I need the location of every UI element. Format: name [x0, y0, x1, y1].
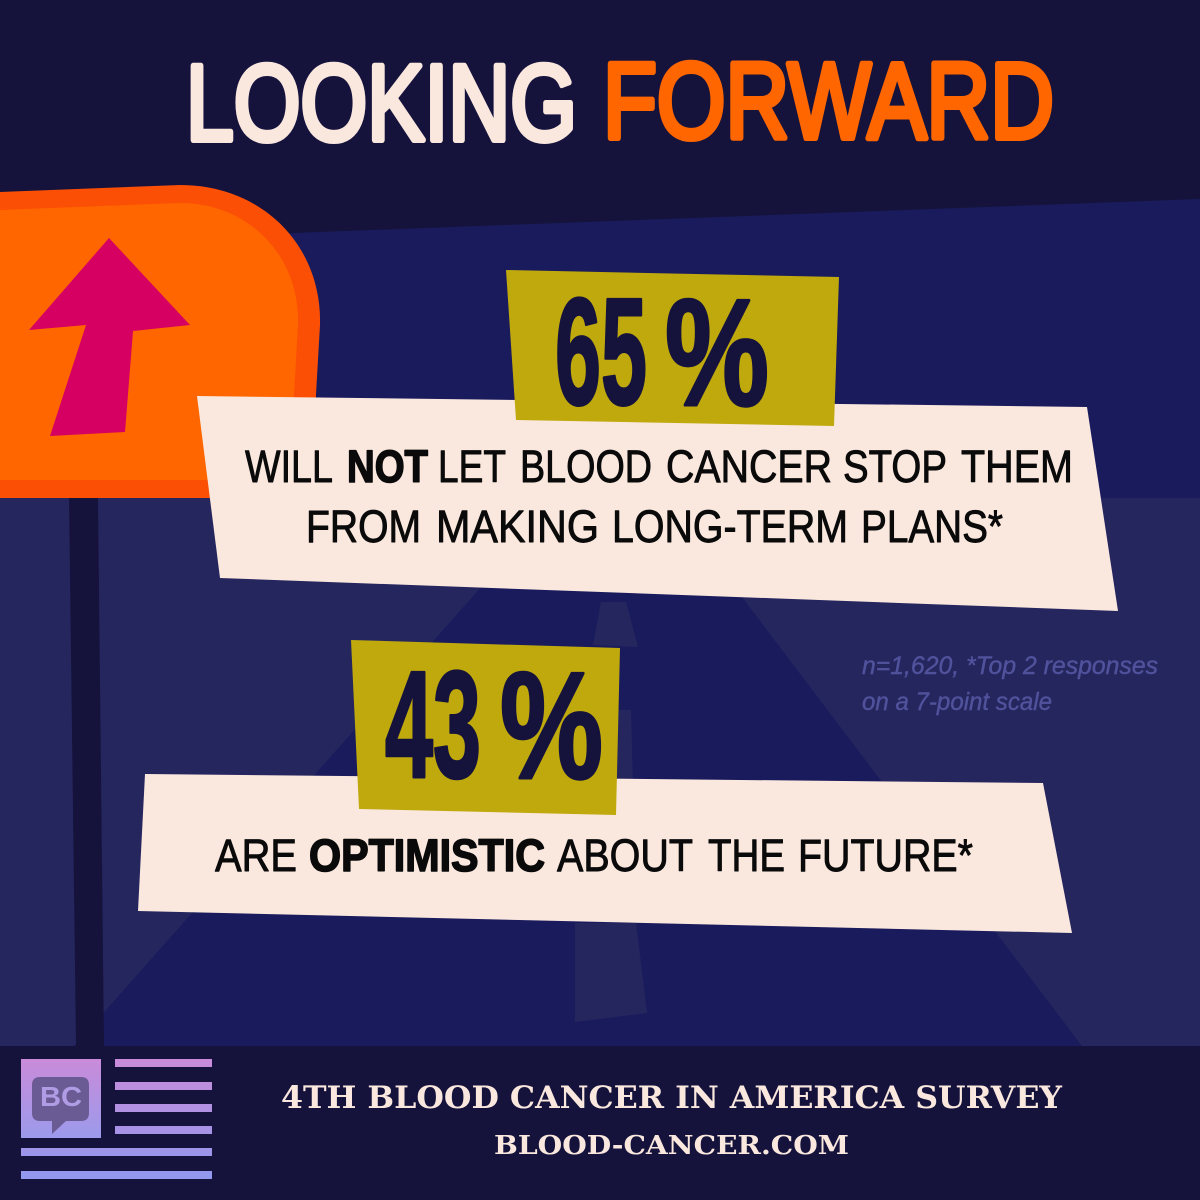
background: ground	[0, 498, 1200, 1046]
title: FORWARD	[603, 40, 1054, 161]
statement text: THEM	[961, 441, 1073, 492]
statement text: FUTURE*	[798, 830, 973, 881]
title	[186, 40, 1054, 163]
panel background	[138, 774, 1072, 933]
statistic tag: 65%	[506, 267, 839, 438]
statement text: BLOOD	[520, 441, 652, 492]
road lane markings	[575, 602, 647, 1022]
statement text: STOP	[843, 441, 947, 492]
footnote	[862, 652, 1158, 716]
icon: upward arrow	[29, 238, 190, 436]
statistic tag: 65%: %	[665, 268, 769, 438]
statement text	[215, 830, 973, 881]
statement text: PLANS*	[861, 501, 1003, 552]
footnote: n=1,620, *Top 2 responses	[862, 652, 1158, 680]
statement text: LET	[438, 441, 506, 492]
sign outer border	[0, 185, 320, 498]
road	[74, 498, 1082, 1046]
statement text: CANCER	[666, 441, 832, 492]
footnote: on a 7-point scale	[862, 688, 1052, 716]
statement text: LONG-TERM	[612, 501, 848, 552]
panel: 43 percent statement	[138, 640, 1072, 933]
statement text: FROM	[306, 501, 421, 552]
statistic tag: 43%	[351, 640, 620, 815]
statistic tag: 43%: 43	[385, 640, 481, 810]
sign post	[69, 498, 104, 1046]
road sign with arrow	[0, 185, 320, 498]
statement text: WILL	[245, 441, 333, 492]
logo: BC flag mark	[21, 1059, 212, 1179]
statement text: OPTIMISTIC	[309, 830, 545, 881]
statement text: ARE	[215, 830, 297, 881]
logo square	[21, 1059, 101, 1138]
statement text	[245, 441, 1073, 552]
statement text: ABOUT	[557, 830, 693, 881]
logo letters: BC	[40, 1081, 82, 1112]
statistic tag: 65%: 65	[555, 267, 647, 437]
statement text: THE	[708, 830, 785, 881]
logo stripes	[21, 1059, 212, 1179]
statement text: MAKING	[436, 501, 599, 552]
background: horizon sky	[0, 199, 1200, 500]
footer bar	[0, 1046, 1200, 1200]
statement text: NOT	[347, 441, 428, 492]
footer survey title: 4TH BLOOD CANCER IN AMERICA SURVEY	[281, 1080, 1063, 1116]
title: LOOKING	[186, 42, 577, 163]
footer website: BLOOD-CANCER.COM	[494, 1131, 849, 1161]
statistic tag: 43%: %	[500, 641, 603, 811]
panel background	[197, 396, 1118, 611]
panel: 65 percent statement	[197, 267, 1118, 611]
icon: speech bubble	[32, 1077, 89, 1134]
sign inner panel	[0, 203, 298, 480]
